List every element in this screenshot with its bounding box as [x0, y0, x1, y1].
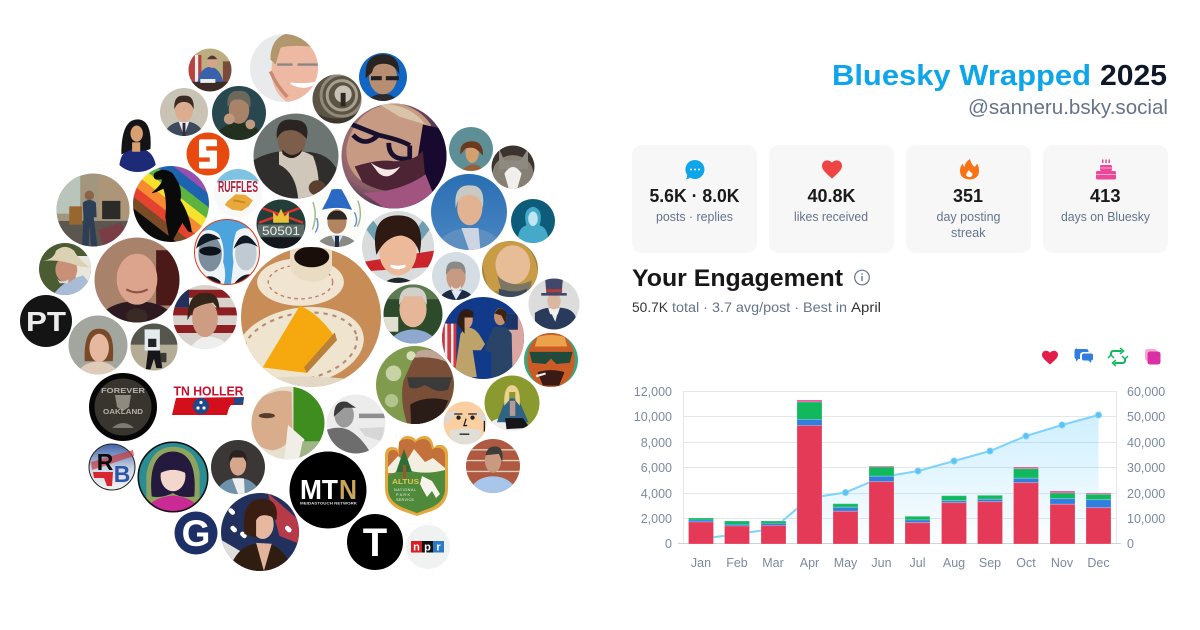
grid lines: [678, 391, 1121, 544]
stat card: day posting streak: 351: [953, 186, 983, 206]
month labels: Jun: [871, 556, 892, 570]
avatar: blonde woman with scarf: [482, 241, 538, 297]
left axis labels: 6,000: [641, 461, 672, 475]
right axis labels: 40,000: [1127, 436, 1165, 450]
avatar: two men cutouts on blue: [194, 220, 260, 284]
bar Feb: [724, 521, 750, 544]
avatar: Guardian G logo: G: [182, 513, 210, 554]
stat card: days on Bluesky: days on Bluesky: [1061, 210, 1151, 224]
bar Dec: [1086, 493, 1111, 544]
title: 2025: [1100, 60, 1167, 92]
month labels: Mar: [762, 556, 784, 570]
stacked bars: [688, 400, 1111, 544]
month labels: Nov: [1051, 556, 1074, 570]
left axis labels: 2,000: [641, 512, 672, 526]
avatar: man in dark glasses on blue: [359, 53, 407, 101]
icon: likes heart: [1042, 351, 1058, 364]
avatar: painted face with green glasses: [524, 332, 578, 388]
left axis labels: [634, 385, 672, 551]
avatar: man at desk with flag: [188, 48, 232, 93]
avatar: man on bright green: [252, 386, 326, 460]
avatar: woman with red-brown hair: [68, 316, 128, 374]
engagement summary: 50.7K: [632, 299, 669, 315]
avatar: blue hoodie figure: [511, 199, 555, 243]
icon: quotes squares: [1145, 349, 1160, 364]
cumulative area and line: [701, 412, 1102, 544]
avatar: New York Times T: T: [363, 521, 387, 565]
avatar: cartoon bald man: [444, 402, 486, 446]
month labels: [691, 556, 1110, 570]
stat card: posts and replies: 5.6K · 8.0K: [650, 186, 740, 206]
avatar: RB logo: R: [97, 449, 114, 475]
engagement summary: total · 3.7 avg/post · Best in: [672, 299, 847, 315]
avatar: RB logo: [89, 444, 135, 490]
avatar: man on brick wall: [466, 439, 520, 493]
avatar: Raiders Forever Oakland: [89, 373, 157, 441]
bar Jul: [905, 516, 930, 544]
engagement summary: [632, 299, 881, 315]
handle: @sanneru.bsky.social: [968, 97, 1168, 119]
avatar: woman with short hair, flag background: [362, 211, 434, 283]
stat card: day posting streak: day posting: [936, 210, 1001, 224]
bar Oct: [1014, 467, 1038, 544]
avatar: MeidasTouch Network logo: MEIDASTOUCH NETWORK: [300, 500, 357, 506]
engagement summary: April: [851, 299, 881, 315]
title: Bluesky Wrapped: [832, 60, 1091, 92]
avatar: Raiders Forever Oakland: FOREVER: [101, 386, 146, 395]
right axis labels: 60,000: [1127, 385, 1165, 399]
stat card: likes received: 40.8K: [808, 186, 856, 206]
left axis labels: 10,000: [634, 410, 672, 424]
avatar: MeidasTouch Network logo: N: [339, 474, 357, 505]
month labels: Sep: [979, 556, 1001, 570]
logo: Alt US National Park Service badge: PARK: [396, 493, 410, 497]
stat card: days on Bluesky: [1043, 145, 1168, 253]
bar Jun: [869, 466, 894, 544]
right axis labels: 30,000: [1127, 461, 1165, 475]
engagement chart: [634, 385, 1165, 570]
avatar: person with QR sign: [130, 324, 178, 370]
avatar: PT logo: PT: [26, 306, 66, 337]
logo: Alt US National Park Service badge: [385, 436, 448, 516]
bar Mar: [761, 521, 786, 544]
avatar: NPR logo: [406, 525, 450, 569]
avatar: man in green sweater, hands at face: [212, 86, 266, 140]
logo: TN Holler: TN HOLLER: [174, 384, 244, 398]
avatar: 50501 plate: 50501: [262, 224, 300, 238]
left axis labels: 4,000: [641, 487, 672, 501]
stat card: likes received: likes received: [794, 210, 868, 224]
month labels: Jan: [691, 556, 711, 570]
bar Sep: [978, 495, 1002, 544]
right axis labels: 50,000: [1127, 410, 1165, 424]
month labels: May: [834, 556, 858, 570]
month labels: Oct: [1016, 556, 1036, 570]
avatar: grey-haired man: [432, 252, 480, 300]
avatar: Raiders Forever Oakland: OAKLAND: [103, 407, 144, 416]
avatar: fluffy cat: [492, 146, 534, 192]
avatar: smiling man in dark glasses, purple tint: [342, 104, 446, 211]
avatar: Ruffles chip bag: RUFFLES: [218, 179, 258, 196]
avatar: PT logo: [20, 295, 72, 347]
heading: Your Engagement: Your Engagement: [632, 265, 843, 292]
right axis labels: [1127, 385, 1165, 551]
stat card: posts and replies: posts · replies: [656, 210, 733, 224]
avatar: young man on teal: [449, 127, 493, 171]
legend icons: [1042, 348, 1160, 366]
avatar: orange pie on floral plates: [241, 247, 381, 387]
stat card: day posting streak: streak: [951, 226, 986, 240]
icon: replies bubbles: [1074, 348, 1093, 363]
avatar: man in blue blazer, dark background: [211, 440, 265, 494]
avatar: Uncle Sam: [528, 278, 580, 330]
avatar: smiling older man in plaid: [384, 284, 442, 344]
avatar: silhouette on pride stripes: [133, 166, 209, 242]
logo: Alt US National Park Service badge: SERVICE: [396, 498, 414, 502]
bar Jan: [688, 518, 714, 544]
avatar: NPR logo: n: [413, 542, 420, 554]
avatar: orange S logo: [186, 132, 230, 176]
bar Apr: [797, 400, 822, 544]
avatar: woman with flag background: [221, 493, 299, 571]
avatar: black-and-white man in profile: [326, 394, 386, 454]
avatar: bald man: [94, 238, 182, 324]
logo: Alt US National Park Service badge: ALTUS: [392, 477, 419, 486]
left axis labels: 0: [665, 537, 672, 551]
avatar: spiral tunnel: [312, 74, 363, 124]
bar May: [833, 504, 858, 544]
left axis labels: 12,000: [634, 385, 672, 399]
stat card: posts and replies: [632, 145, 757, 253]
stat card: days on Bluesky: 413: [1090, 186, 1120, 206]
avatar: MeidasTouch Network logo: [290, 452, 366, 528]
logo: Alt US National Park Service badge: NATIONAL: [394, 488, 416, 492]
month labels: Dec: [1087, 556, 1110, 570]
avatar: man with glasses in suit: [160, 88, 208, 137]
bar Nov: [1050, 491, 1075, 544]
avatar: New York Times T: [347, 514, 403, 570]
avatar: woman in blue cutout: [119, 119, 156, 172]
avatar: NPR logo: r: [436, 542, 441, 554]
bar Aug: [942, 496, 966, 544]
avatar: NPR logo: p: [424, 542, 431, 554]
right axis labels: 0: [1127, 537, 1134, 551]
avatar: 50501 plate: [256, 200, 306, 250]
month labels: Aug: [943, 556, 965, 570]
avatar: fireplace room with woman: [56, 174, 131, 250]
icon: reposts arrows: [1108, 348, 1128, 366]
avatar: Guardian G logo: [174, 512, 218, 554]
avatar: smiling man with glasses: [250, 34, 318, 102]
stat card: day posting streak: [906, 145, 1031, 253]
stat card: likes received: [769, 145, 894, 253]
avatar: man with party hat: [312, 189, 362, 247]
avatar: two people shaking hands with flags: [442, 297, 524, 379]
avatar: man in cowboy hat: [39, 243, 91, 295]
avatar: RB logo: B: [114, 461, 130, 487]
month labels: Apr: [800, 556, 819, 570]
avatar: man in blue suit on blue: [431, 174, 507, 250]
avatar: illustrated girl with bangs: [138, 442, 208, 512]
avatar: man in sunglasses among foliage: [376, 346, 454, 424]
month labels: Feb: [726, 556, 748, 570]
right axis labels: 20,000: [1127, 487, 1165, 501]
avatar: MeidasTouch Network logo: MT: [300, 474, 338, 505]
avatar: young man on flag: [173, 285, 237, 349]
logo: TN Holler: [172, 384, 244, 415]
avatar: Ruffles chip bag: [214, 169, 262, 217]
icon: info: [855, 270, 869, 285]
avatar: man with scarf and cat: [254, 114, 338, 198]
month labels: Jul: [910, 556, 925, 570]
bubble cluster of avatars: [20, 32, 580, 571]
avatar: blonde woman sitting in field: [484, 376, 540, 431]
left axis labels: 8,000: [641, 436, 672, 450]
right axis labels: 10,000: [1127, 512, 1165, 526]
